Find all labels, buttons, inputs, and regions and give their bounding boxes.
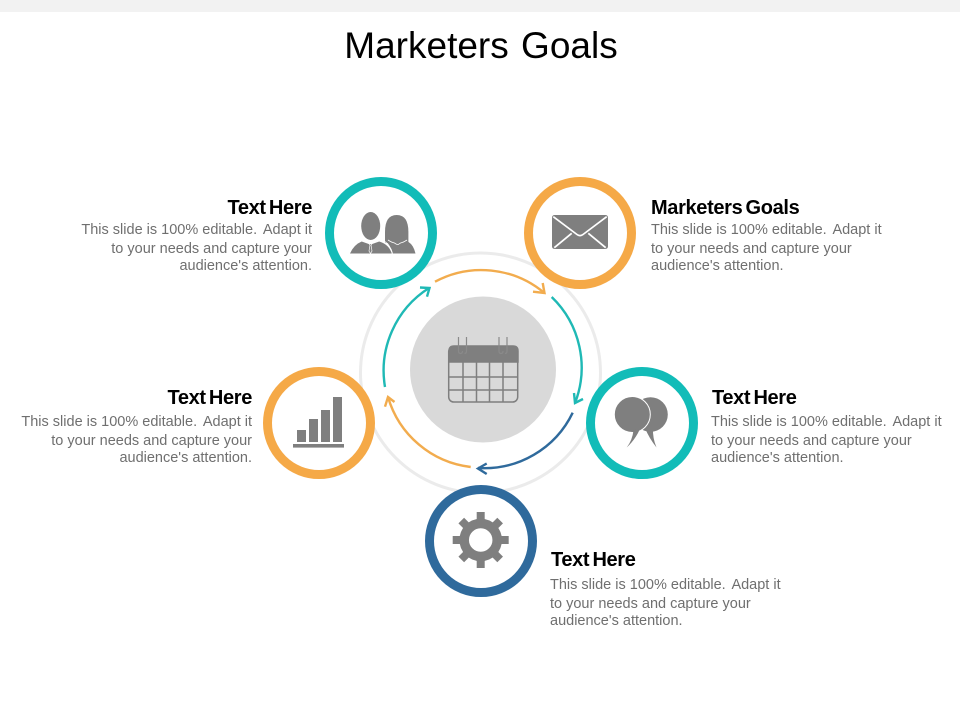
icon: calendar: [449, 337, 518, 402]
icon: people: [350, 212, 416, 254]
text block: middle right: Text Here: [712, 387, 797, 409]
text block: middle right: [711, 387, 942, 466]
center circle: [410, 296, 556, 442]
text block: top left: Text Here: [227, 197, 312, 219]
node: mail: [528, 182, 632, 284]
text block: top left: This slide is 100% editable. Adapt it: [81, 222, 312, 238]
outer ring: [360, 253, 600, 493]
text block: middle right: to your needs and capture your: [711, 433, 912, 449]
text block: bottom: Text Here: [551, 549, 636, 571]
text block: middle left: This slide is 100% editable. Adapt it: [21, 414, 252, 430]
arrow: teal left: [384, 288, 430, 387]
text block: bottom: This slide is 100% editable. Adapt it: [550, 577, 781, 593]
text block: top left: to your needs and capture your: [111, 241, 312, 257]
node: people: [330, 182, 432, 284]
title: Marketers Goals: [344, 25, 618, 66]
text block: bottom: to your needs and capture your: [550, 596, 751, 612]
arrow: orange left: [385, 397, 471, 467]
text block: top right: This slide is 100% editable. Adapt it: [651, 222, 882, 238]
text block: bottom: [550, 549, 781, 629]
icon: gear: [453, 512, 509, 568]
icon: speech bubbles: [614, 396, 668, 448]
text block: top right: to your needs and capture your: [651, 241, 852, 257]
arrow: orange top: [435, 270, 544, 293]
icon: bar chart: [293, 397, 344, 448]
text block: middle left: to your needs and capture your: [51, 433, 252, 449]
arrow: blue bottom: [478, 413, 573, 474]
text block: top right: Marketers Goals: [651, 197, 800, 219]
text block: bottom: audience's attention.: [550, 613, 683, 629]
text block: middle left: Text Here: [167, 387, 252, 409]
text block: top right: [651, 197, 882, 274]
text block: top left: audience's attention.: [179, 258, 312, 274]
text block: middle right: This slide is 100% editable. Adapt it: [711, 414, 942, 430]
text block: top left: [81, 197, 312, 274]
node: gear: [430, 490, 532, 592]
node: speech bubbles: [590, 372, 694, 474]
node: chart: [268, 372, 370, 474]
text block: top right: audience's attention.: [651, 258, 784, 274]
text block: middle left: [21, 387, 252, 466]
text block: middle right: audience's attention.: [711, 450, 844, 466]
arrow: teal right: [552, 297, 583, 403]
icon: envelope: [552, 215, 608, 249]
text block: middle left: audience's attention.: [119, 450, 252, 466]
